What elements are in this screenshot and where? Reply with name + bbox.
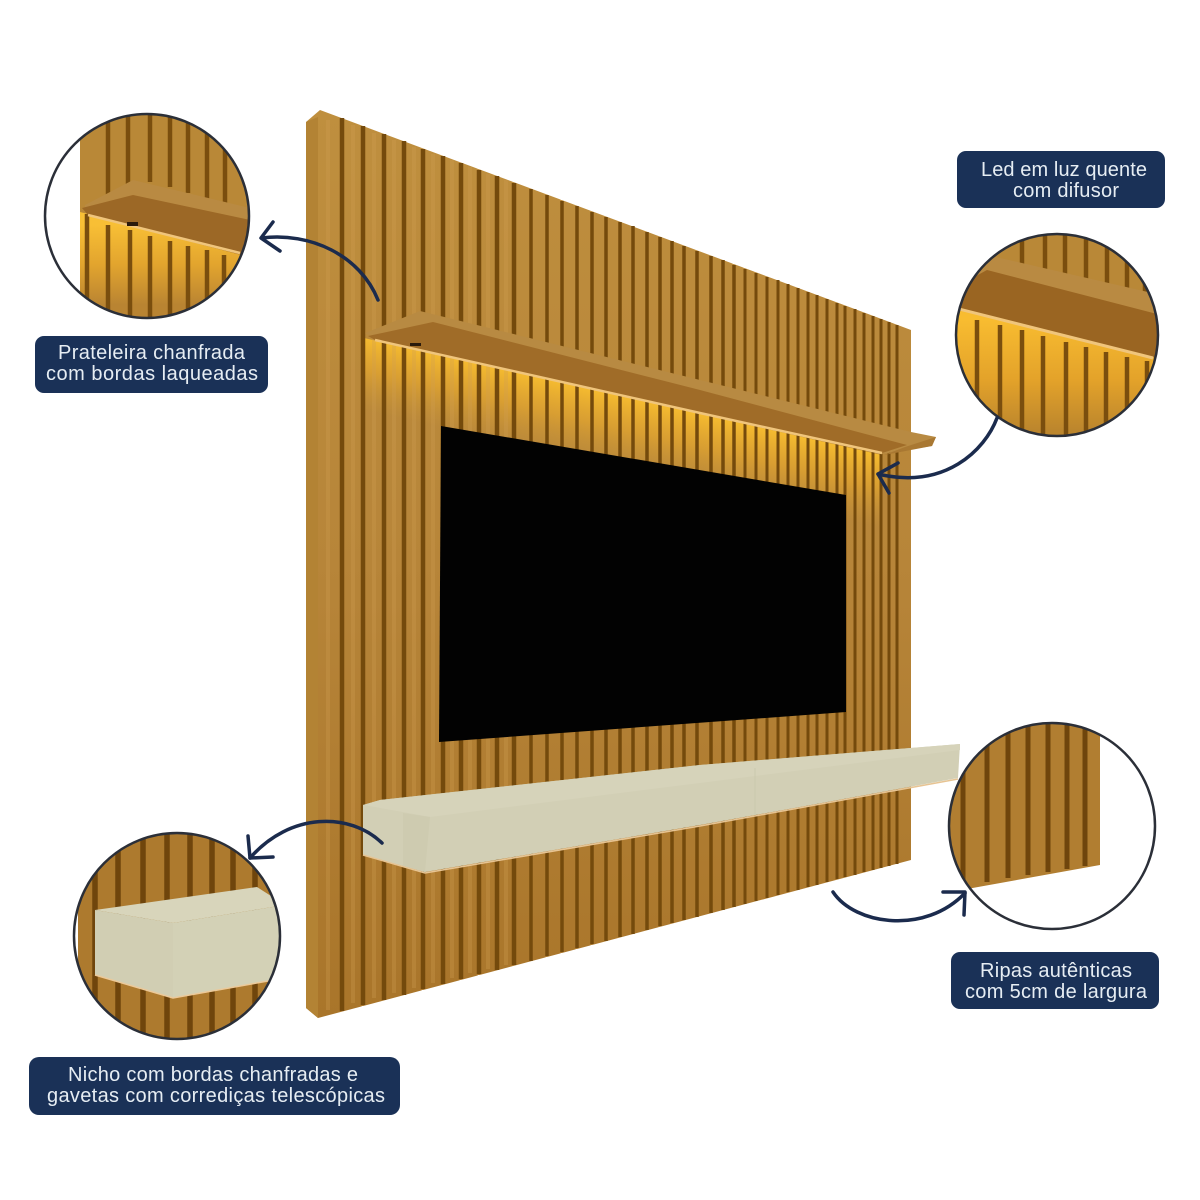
arrow: niche to inset — [248, 821, 382, 858]
label: nicho: gavetas com corrediças telescópicas — [47, 1085, 385, 1107]
label: led: Led em luz quente — [981, 159, 1147, 181]
cream niche with drawers — [363, 744, 960, 873]
label: prateleira: com bordas laqueadas — [46, 363, 258, 385]
inset: chamfered shelf detail — [45, 110, 255, 325]
label: nicho: Nicho com bordas chanfradas e — [68, 1064, 358, 1086]
inset: slats detail — [945, 720, 1155, 929]
label: prateleira: Prateleira chanfrada — [58, 342, 246, 364]
television screen — [439, 426, 846, 742]
inset: niche detail — [74, 830, 285, 1042]
label: prateleira — [35, 336, 268, 393]
label: ripas: Ripas autênticas — [980, 960, 1132, 982]
LED glow on slats — [364, 338, 882, 560]
arrow: panel to slats inset — [833, 892, 965, 921]
label: ripas: com 5cm de largura — [965, 981, 1148, 1003]
arrow: shelf to inset — [261, 222, 378, 300]
label: nicho — [29, 1057, 400, 1115]
label: led: com difusor — [1013, 180, 1119, 202]
inset: LED detail — [950, 234, 1165, 440]
arrow: inset to LED — [878, 418, 997, 493]
slatted wall panel — [306, 110, 911, 1018]
LED shelf — [365, 311, 936, 455]
label: ripas — [951, 952, 1159, 1009]
label: led — [957, 151, 1165, 208]
